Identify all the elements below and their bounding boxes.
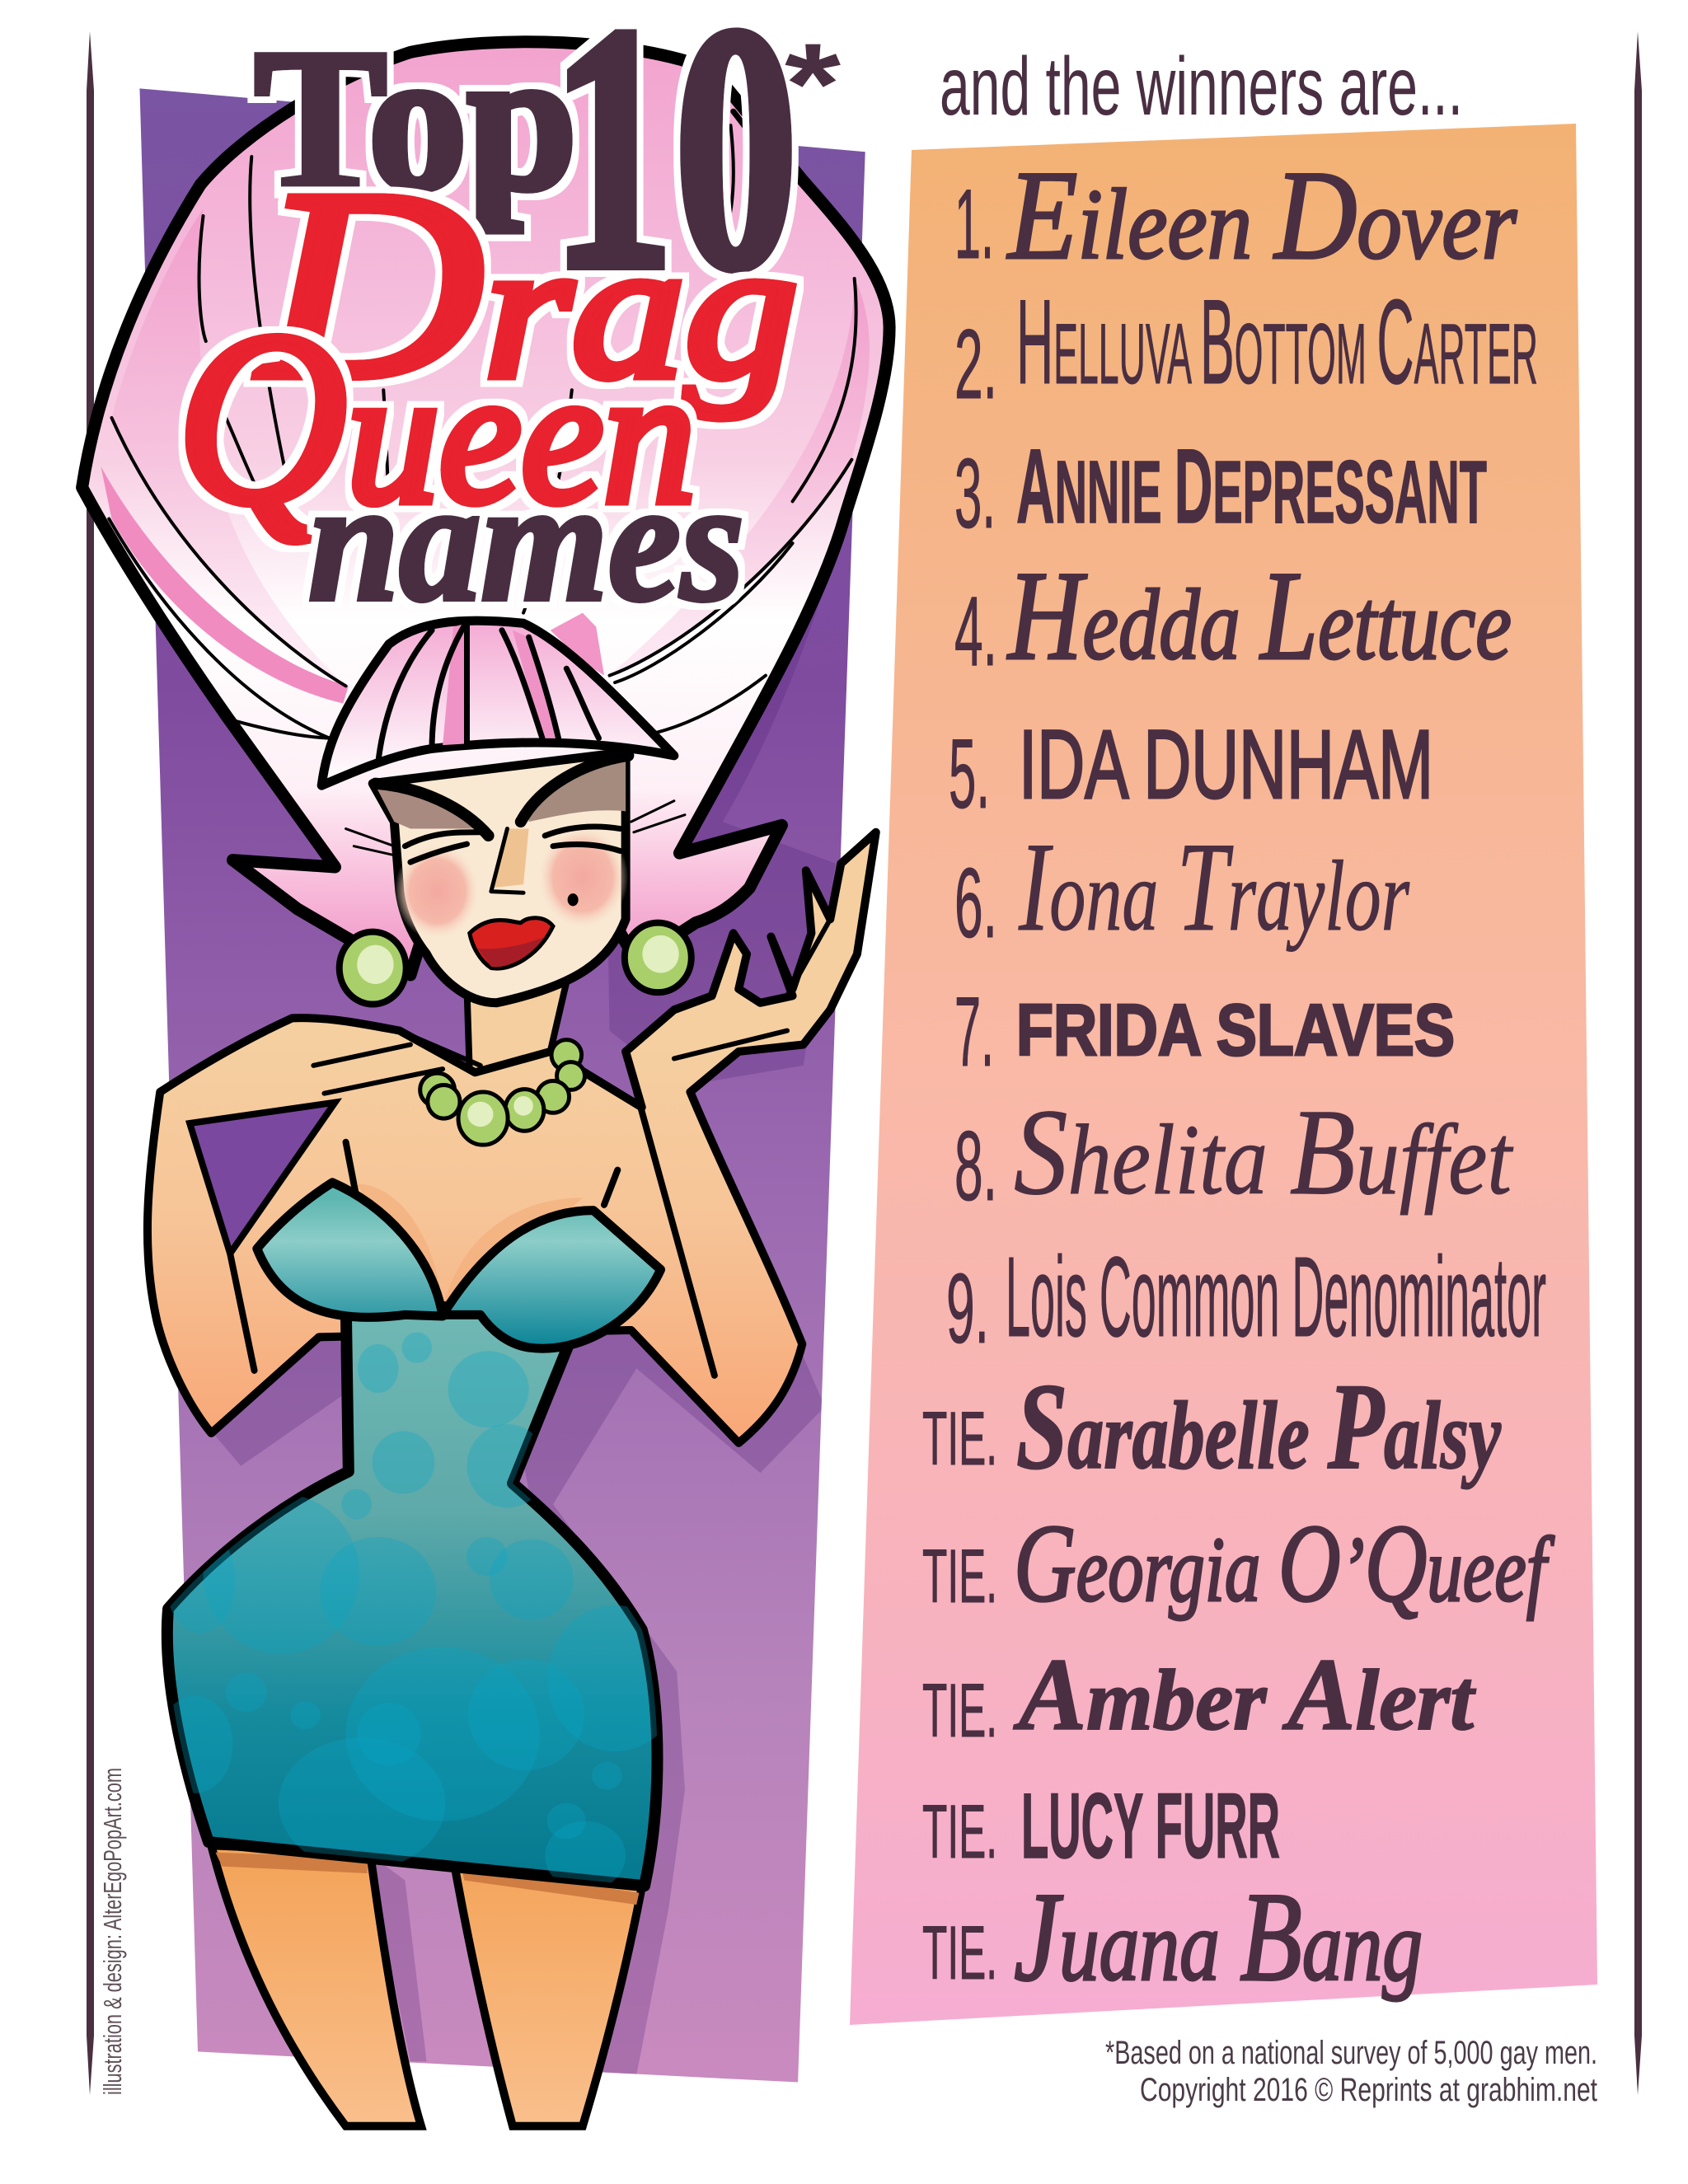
figure: arms and chest xyxy=(148,832,876,1443)
figure: necklace xyxy=(420,1040,584,1145)
title: Queen: Queen xyxy=(176,281,696,555)
item 2: HELLUVA BOTTOM CARTER xyxy=(1016,274,1538,409)
item 8: Shelita Buffet xyxy=(1014,1084,1514,1221)
tie: Georgia O'Queef: Georgia O’Queef xyxy=(1014,1502,1555,1625)
illustration: drag queen on purple panel xyxy=(82,42,889,2126)
item 7: 7. xyxy=(954,977,994,1087)
panel: purple backdrop xyxy=(139,88,865,2083)
item 4: Hedda Lettuce xyxy=(1006,545,1512,687)
title: names: names xyxy=(308,446,744,637)
figure: bust xyxy=(257,1183,661,1348)
hair: towering beehive xyxy=(82,42,889,975)
item 3: 3. xyxy=(954,438,996,549)
tie: Amber Alert: TIE. xyxy=(922,1669,997,1753)
figure: face xyxy=(346,752,685,1003)
title: Drag: Drag xyxy=(255,134,798,435)
tie: Lucy Furr: TIE. xyxy=(922,1790,997,1874)
item 7: FRIDA SLAVES xyxy=(1016,989,1455,1071)
item 6: 6. xyxy=(954,848,997,958)
tie: Lucy Furr xyxy=(922,1774,1280,1877)
figure drop shadow xyxy=(215,602,836,2074)
title xyxy=(176,0,842,637)
item 1: 1. xyxy=(954,169,994,279)
item 2: 2. xyxy=(954,309,997,419)
tie: Juana Bang: Juana Bang xyxy=(1014,1866,1423,2008)
tie: Sarabelle Palsy: Sarabelle Palsy xyxy=(1016,1358,1501,1495)
winners list xyxy=(922,144,1555,2008)
footnote xyxy=(1105,2035,1597,2108)
tie: Sarabelle Palsy: TIE. xyxy=(922,1397,997,1481)
winners list: LUCY FURR xyxy=(1021,1774,1280,1877)
text: illustrator credit: illustration & design: AlterEgoPopArt.com xyxy=(98,1768,127,2095)
item 8: 8. xyxy=(954,1111,997,1221)
item 5: 5. xyxy=(949,719,990,829)
item 5: IDA DUNHAM xyxy=(1019,710,1433,819)
tie: Amber Alert: Amber Alert xyxy=(1013,1638,1476,1752)
panel: winners list background xyxy=(850,124,1597,2025)
tie: Juana Bang: TIE. xyxy=(922,1911,997,1995)
figure: teal dress xyxy=(157,1296,682,1891)
figure: legs xyxy=(211,1845,642,2126)
item 2 xyxy=(954,274,1538,419)
item 5 xyxy=(949,710,1433,829)
item 9: 9. xyxy=(946,1254,989,1364)
item 7 xyxy=(954,977,1455,1087)
item 3 xyxy=(954,428,1487,549)
item 1: Eileen Dover xyxy=(1006,144,1517,286)
title: Top: Top xyxy=(255,8,577,232)
title: asterisk: * xyxy=(785,19,842,148)
item 6: Iona Traylor xyxy=(1018,816,1409,958)
panel: right side rail xyxy=(1634,31,1642,2095)
item 4: 4. xyxy=(954,576,997,687)
figure: neck xyxy=(443,982,593,1183)
tie: Georgia O'Queef: TIE. xyxy=(922,1535,997,1619)
hair: bangs xyxy=(321,621,674,785)
panel: left border rail xyxy=(87,31,94,2095)
figure: earrings xyxy=(340,923,692,1004)
